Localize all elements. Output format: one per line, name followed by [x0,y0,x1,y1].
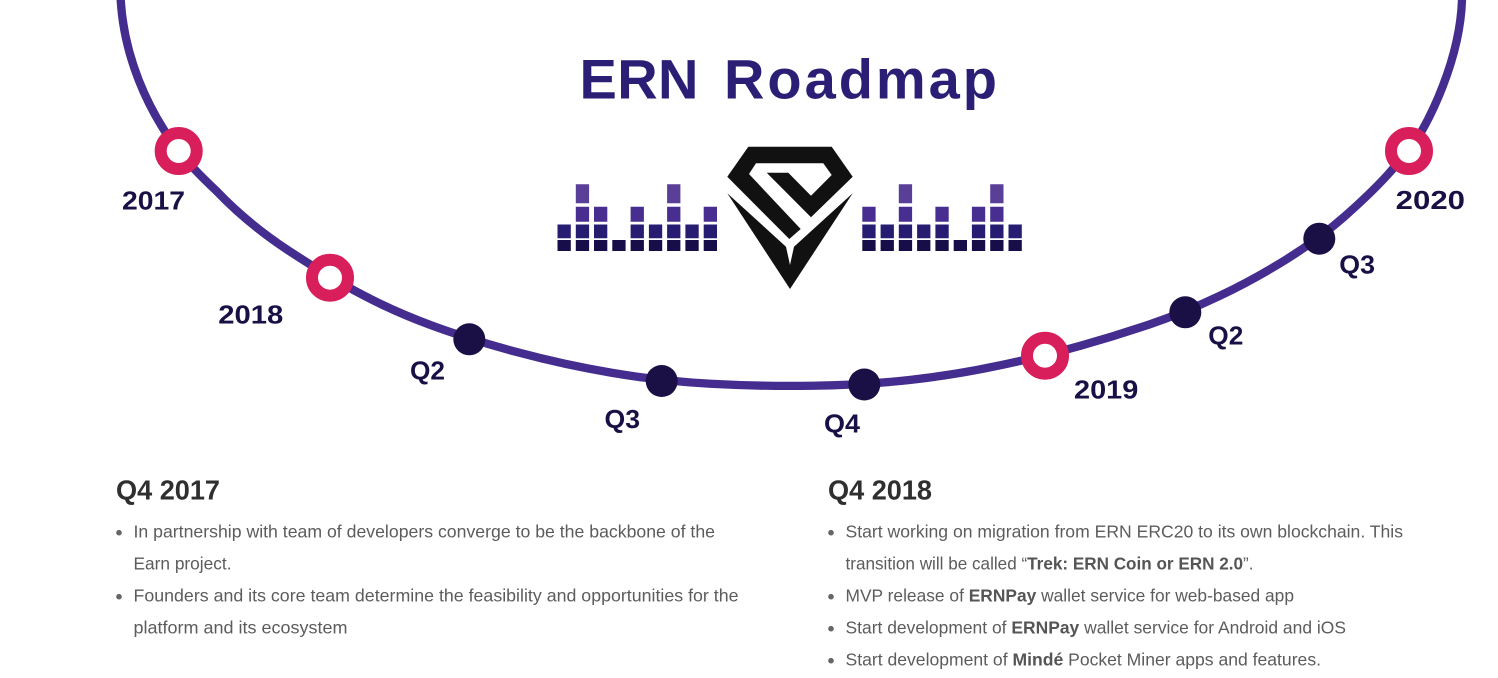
heading: Q4 2018: Q4 2018 [828,474,932,505]
right equalizer bars [862,184,1022,251]
milestone: Q4 2018 [824,368,880,438]
milestone: 2018: 2018 [218,299,283,329]
milestone: Q3 2018 [604,365,678,434]
milestone: Q2 2019: Q2 [1208,320,1243,350]
bullet list: Q4 2018: Start development of Mindé Pocket Miner apps and features. [846,650,1321,670]
left equalizer bars [558,184,717,251]
bullet list: Q4 2017: platform and its ecosystem [134,618,348,638]
title: Roadmap [724,48,997,110]
milestone: Q3 2018: Q3 [604,404,640,434]
bullet list: Q4 2018: MVP release of ERNPay wallet service for web-based app [846,586,1294,606]
bullet list: Q4 2017: In partnership with team of developers converge to be the backbone of the [134,522,715,542]
bullet list: Q4 2017 [116,522,738,638]
title [580,48,997,110]
milestone: Q3 2019 [1303,223,1375,279]
milestone: Q4 2018: Q4 [824,408,861,438]
logo: equalizer bars and diamond [558,147,1022,289]
milestone: Q3 2019: Q3 [1339,249,1375,279]
milestone: Q2 2018: Q2 [410,355,445,385]
milestone: Q2 2018 [410,323,485,385]
title: ERN [580,48,698,110]
milestone: Q2 2019 [1169,296,1243,350]
timeline curve [120,0,1462,386]
bullet list: Q4 2018: Start working on migration from ERN ERC20 to its own blockchain. This [846,522,1403,542]
diamond logo [727,147,853,289]
bullet list: Q4 2018: transition will be called “Trek: ERN Coin or ERN 2.0”. [846,554,1253,574]
milestone: 2019: 2019 [1074,374,1138,404]
milestone: 2020: 2020 [1396,185,1465,215]
panel: Q4 2017 [116,474,738,638]
milestone: 2018 [218,260,348,329]
bullet list: Q4 2018: Start development of ERNPay wallet service for Android and iOS [846,618,1346,638]
bullet list: Q4 2017: Founders and its core team determine the feasibility and opportunities for the [134,586,738,606]
bullet list: Q4 2018 [828,522,1403,670]
milestone: 2017 [122,133,197,216]
bullet list: Q4 2017: Earn project. [134,554,232,574]
heading: Q4 2017: Q4 2017 [116,474,220,505]
milestone: 2017: 2017 [122,186,185,216]
milestone: 2020 [1391,133,1465,215]
panel: Q4 2018 [828,474,1403,670]
milestone: 2019 [1027,338,1138,404]
